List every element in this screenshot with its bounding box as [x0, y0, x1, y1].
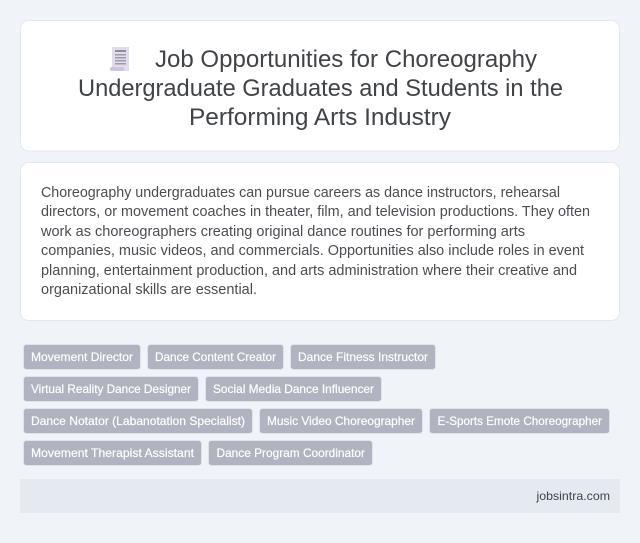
description text	[40, 185, 590, 298]
panel: description card	[20, 162, 620, 320]
tag: E-Sports Emote Choreographer	[430, 408, 610, 434]
tag: Dance Notator	[24, 408, 252, 434]
description text: companies, music videos, and commercials. Opportunities also include roles in event	[41, 243, 584, 259]
description text: Choreography undergraduates can pursue careers as dance instructors, rehearsal	[41, 185, 560, 201]
tag: E-Sports Emote Choreographer: E-Sports Emote Choreographer	[438, 414, 602, 428]
tag: Social Media Dance Influencer	[206, 376, 382, 402]
description text: work as choreographers creating original dance routines for performing arts	[40, 224, 525, 240]
tag: Movement Director	[24, 344, 140, 370]
tag list: job roles	[24, 344, 610, 466]
title: Undergraduate Graduates and Students in the	[78, 75, 563, 102]
tag: Dance Program Coordinator	[208, 440, 372, 466]
description text: organizational skills are essential.	[41, 282, 257, 298]
footer text: jobsintra.com	[535, 489, 610, 503]
tag: Virtual Reality Dance Designer: Virtual Reality Dance Designer	[31, 382, 191, 396]
description text: directors, or movement coaches in theater, film, and television productions. They often	[41, 204, 590, 220]
tag: Music Video Choreographer	[260, 408, 422, 434]
title: Job Opportunities for Choreography	[155, 46, 537, 73]
footer bar	[20, 479, 620, 513]
tag: Dance Fitness Instructor	[290, 344, 436, 370]
tag: Social Media Dance Influencer: Social Media Dance Influencer	[213, 382, 374, 396]
tag: Movement Therapist Assistant: Movement Therapist Assistant	[31, 446, 195, 460]
tag: Movement Director: Movement Director	[31, 350, 133, 364]
tag: Dance Content Creator	[148, 344, 284, 370]
title	[78, 46, 563, 131]
tag: Dance Program Coordinator: Dance Program Coordinator	[216, 446, 365, 460]
description text: planning, entertainment production, and arts administration where their creative and	[41, 263, 577, 279]
tag: Dance Notator: Dance Notator (Labanotation Specialist)	[31, 414, 245, 428]
tag: Dance Fitness Instructor: Dance Fitness Instructor	[298, 350, 428, 364]
panel: title card	[20, 20, 620, 151]
tag: Virtual Reality Dance Designer	[24, 376, 198, 402]
tag: Movement Therapist Assistant	[24, 440, 202, 466]
tag: Music Video Choreographer: Music Video Choreographer	[267, 414, 415, 428]
tag: Dance Content Creator: Dance Content Creator	[155, 350, 276, 364]
title: Performing Arts Industry	[189, 104, 451, 131]
icon: document scroll	[110, 47, 129, 71]
